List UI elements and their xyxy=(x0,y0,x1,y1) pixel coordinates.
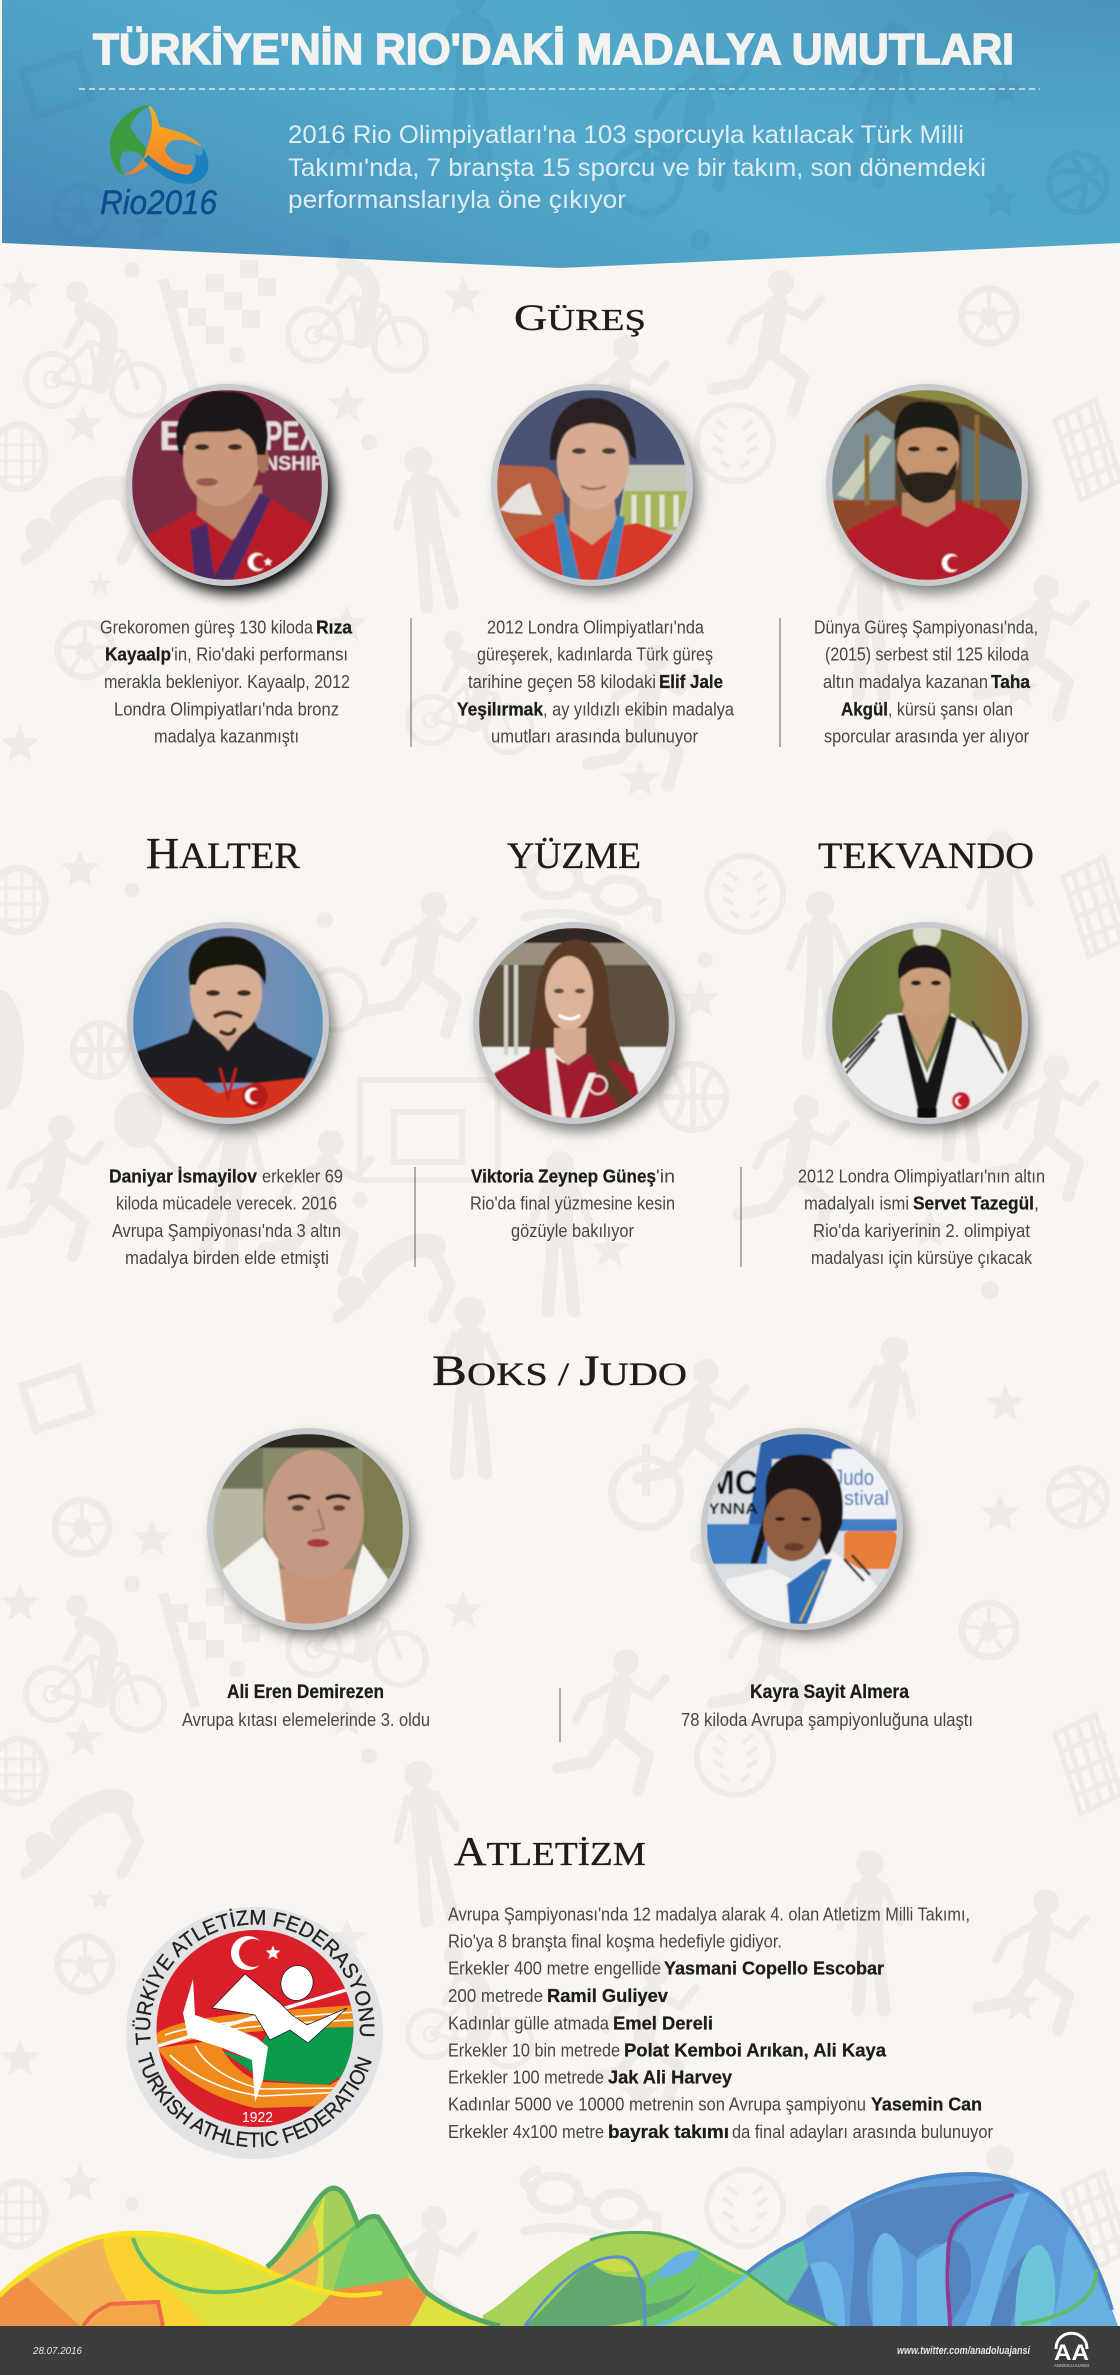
text: Atletizm list: Erkekler 100 metrede xyxy=(448,2068,604,2088)
text: Taha Akgül: Akgül xyxy=(841,700,888,720)
text: Atletizm list: Erkekler 10 bin metrede xyxy=(448,2040,620,2060)
text: Daniyar İsmayilov: Avrupa Şampiyonası'nda 3 altın xyxy=(112,1221,341,1241)
photo: Taha Akgül xyxy=(826,384,1033,593)
text: header intro: Takımı'nda, 7 branşta 15 sporcu ve bir takım, son dönemdeki xyxy=(288,154,986,182)
text: header intro xyxy=(288,121,986,214)
icon: Rio 2016 logo: Rio2016 xyxy=(100,184,217,222)
text: Kayra Sayit Almera: 78 kiloda Avrupa şampiyonluğuna ulaştı xyxy=(681,1710,973,1730)
text: Taha Akgül: , kürsü şansı olan xyxy=(888,700,1013,720)
icon: Turkish Athletic Federation logo: TURKISH ATHLETIC FEDERATION xyxy=(138,2052,372,2148)
illustration: colourful Rio mountains xyxy=(0,2174,1118,2326)
icon: Turkish Athletic Federation logo: 1922 xyxy=(242,2109,273,2126)
text: Servet Tazegül: madalyası için kürsüye çıkacak xyxy=(811,1248,1033,1268)
text: Rıza Kayaalp: Kayaalp xyxy=(105,644,171,664)
photo: Viktoria Zeynep Güneş xyxy=(473,922,680,1131)
heading: Güreş: GÜREŞ xyxy=(514,298,646,339)
text: Daniyar İsmayilov: kiloda mücadele verecek. 2016 xyxy=(116,1194,337,1214)
yellow hill xyxy=(0,2188,500,2326)
text: Atletizm list: da final adayları arasında bulunuyor xyxy=(732,2122,993,2142)
text: Daniyar İsmayilov: Daniyar İsmayilov xyxy=(109,1166,257,1186)
text: Atletizm list: Jak Ali Harvey xyxy=(608,2068,732,2088)
text: Atletizm list: Yasemin Can xyxy=(871,2094,982,2114)
blue hill xyxy=(747,2174,1118,2326)
photo: Kayra Sayit Almera xyxy=(701,1428,908,1637)
green peak xyxy=(250,2188,500,2326)
text: Servet Tazegül xyxy=(798,1166,1045,1268)
photo: Daniyar İsmayilov xyxy=(127,922,334,1131)
panel: blue header xyxy=(2,0,1120,268)
text: Elif Jale Yeşilırmak: Elif Jale xyxy=(659,672,723,692)
text: Atletizm list: Ramil Guliyev xyxy=(547,1986,668,2006)
photo: Rıza Kayaalp: E xyxy=(159,412,187,459)
icon: Rio 2016 logo xyxy=(100,105,217,222)
text: Atletizm list: Polat Kemboi Arıkan, Ali Kaya xyxy=(624,2040,887,2060)
text: Servet Tazegül: , xyxy=(1034,1194,1039,1214)
text: Elif Jale Yeşilırmak: 2012 Londra Olimpiyatları'nda xyxy=(487,618,705,638)
photo: Kayra Sayit Almera: MC xyxy=(708,1464,758,1502)
text: Ali Eren Demirezen xyxy=(182,1682,430,1730)
text: Elif Jale Yeşilırmak: tarihine geçen 58 kilodaki xyxy=(468,672,656,692)
text: Rıza Kayaalp: 'in, Rio'daki performansı xyxy=(171,644,348,664)
heading: Tekvando: TEKVANDO xyxy=(818,836,1034,877)
icon: Anadolu Agency logo xyxy=(1054,2333,1089,2368)
text: Kayra Sayit Almera: Kayra Sayit Almera xyxy=(750,1682,909,1703)
text: Daniyar İsmayilov: madalya birden elde etmişti xyxy=(125,1248,329,1268)
text: Atletizm list: Emel Dereli xyxy=(613,2014,713,2034)
text: Atletizm list: Erkekler 400 metre engellide xyxy=(448,1958,661,1978)
text: Daniyar İsmayilov xyxy=(109,1166,343,1268)
text: Atletizm list: Kadınlar 5000 ve 10000 metrenin son Avrupa şampiyonu xyxy=(448,2094,866,2114)
text: Ali Eren Demirezen: Ali Eren Demirezen xyxy=(227,1682,384,1703)
photo: Rıza Kayaalp: NSHIP xyxy=(264,453,324,475)
text: Taha Akgül xyxy=(814,618,1038,746)
text: Rıza Kayaalp: Londra Olimpiyatları'nda bronz xyxy=(114,700,339,720)
footer date: 28.07.2016 xyxy=(32,2345,82,2357)
text: Taha Akgül: (2015) serbest stil 125 kiloda xyxy=(825,644,1030,664)
photo: Elif Jale Yeşilırmak xyxy=(491,384,698,593)
text: Viktoria Zeynep Güneş: Viktoria Zeynep Güneş xyxy=(471,1166,656,1186)
text: Taha Akgül: Dünya Güreş Şampiyonası'nda, xyxy=(814,618,1038,638)
text: Servet Tazegül: Rio'da kariyerinin 2. olimpiyat xyxy=(813,1221,1030,1241)
text: Servet Tazegül: madalyalı ismi xyxy=(804,1194,909,1214)
text: Rıza Kayaalp: merakla bekleniyor. Kayaalp, 2012 xyxy=(104,672,350,692)
text: Rıza Kayaalp: Rıza xyxy=(316,618,353,638)
text: Atletizm list: Rio'ya 8 branşta final koşma hedefiyle gidiyor. xyxy=(448,1932,782,1952)
text: Elif Jale Yeşilırmak: umutları arasında bulunuyor xyxy=(491,726,698,746)
text: Rıza Kayaalp: madalya kazanmıştı xyxy=(154,726,299,746)
icon: Anadolu Agency logo: ANADOLU AJANSI xyxy=(1054,2363,1089,2368)
photo: Kayra Sayit Almera: YNNA xyxy=(708,1501,758,1518)
text: Rıza Kayaalp: Grekoromen güreş 130 kiloda xyxy=(100,618,314,638)
photo: Ali Eren Demirezen xyxy=(207,1428,414,1637)
text: Kayra Sayit Almera xyxy=(681,1682,973,1730)
heading: Atletizm: ATLETİZM xyxy=(454,1828,646,1874)
text: Atletizm list: Erkekler 4x100 metre xyxy=(448,2122,604,2142)
icon: Turkish Athletic Federation logo: TÜRKİYE ATLETİZM FEDERASYONU xyxy=(132,1908,375,2046)
text: Taha Akgül: sporcular arasında yer alıyor xyxy=(824,726,1029,746)
text: Rıza Kayaalp xyxy=(100,618,353,746)
text: Viktoria Zeynep Güneş xyxy=(470,1166,675,1241)
text: Taha Akgül: altın madalya kazanan xyxy=(823,672,988,692)
photo: Rıza Kayaalp: PEX xyxy=(265,412,317,459)
text: Elif Jale Yeşilırmak: Yeşilırmak xyxy=(457,700,544,720)
photo: Kayra Sayit Almera: stival xyxy=(844,1488,889,1510)
heading: Halter: HALTER xyxy=(146,829,300,878)
footer bar xyxy=(0,2326,1120,2375)
title: TÜRKİYE'NİN RIO'DAKİ MADALYA UMUTLARI xyxy=(93,25,1014,74)
text: Taha Akgül: Taha xyxy=(991,672,1031,692)
text: header intro: 2016 Rio Olimpiyatları'na 103 sporcuyla katılacak Türk Milli xyxy=(288,121,964,149)
text: Viktoria Zeynep Güneş: Rio'da final yüzmesine kesin xyxy=(470,1194,675,1214)
text: Atletizm list: bayrak takımı xyxy=(608,2122,729,2142)
photo: Kayra Sayit Almera: Judo xyxy=(834,1465,874,1490)
text: Elif Jale Yeşilırmak: , ay yıldızlı ekibin madalya xyxy=(543,700,735,720)
text: Elif Jale Yeşilırmak xyxy=(457,618,735,746)
text: Servet Tazegül: Servet Tazegül xyxy=(913,1194,1034,1214)
text: Elif Jale Yeşilırmak: güreşerek, kadınlarda Türk güreş xyxy=(477,644,713,664)
text: Daniyar İsmayilov: erkekler 69 xyxy=(262,1166,343,1186)
heading: Yüzme: YÜZME xyxy=(507,836,641,877)
photo: Rıza Kayaalp xyxy=(126,384,334,594)
text: Atletizm list: Kadınlar gülle atmada xyxy=(448,2014,610,2034)
text: Ali Eren Demirezen: Avrupa kıtası elemelerinde 3. oldu xyxy=(182,1710,430,1730)
text: Atletizm list xyxy=(448,1904,993,2142)
text: Viktoria Zeynep Güneş: 'in xyxy=(656,1166,675,1186)
footer url: www.twitter.com/anadoluajansi xyxy=(897,2345,1031,2357)
icon: Turkish Athletic Federation logo xyxy=(126,1907,383,2159)
text: Servet Tazegül: 2012 Londra Olimpiyatları'nın altın xyxy=(798,1166,1045,1186)
text: Atletizm list: Yasmani Copello Escobar xyxy=(664,1958,884,1978)
photo: Servet Tazegül xyxy=(826,917,1033,1131)
heading: Boks / Judo: BOKS / JUDO xyxy=(432,1348,687,1395)
text: Viktoria Zeynep Güneş: gözüyle bakılıyor xyxy=(511,1221,634,1241)
middle green hill xyxy=(483,2231,837,2326)
text: header intro: performanslarıyla öne çıkıyor xyxy=(288,186,626,214)
text: Atletizm list: Avrupa Şampiyonası'nda 12 madalya alarak 4. olan Atletizm Milli Takımı, xyxy=(448,1904,970,1924)
text: Atletizm list: 200 metrede xyxy=(448,1986,543,2006)
icon: Anadolu Agency logo: AA xyxy=(1054,2340,1089,2365)
